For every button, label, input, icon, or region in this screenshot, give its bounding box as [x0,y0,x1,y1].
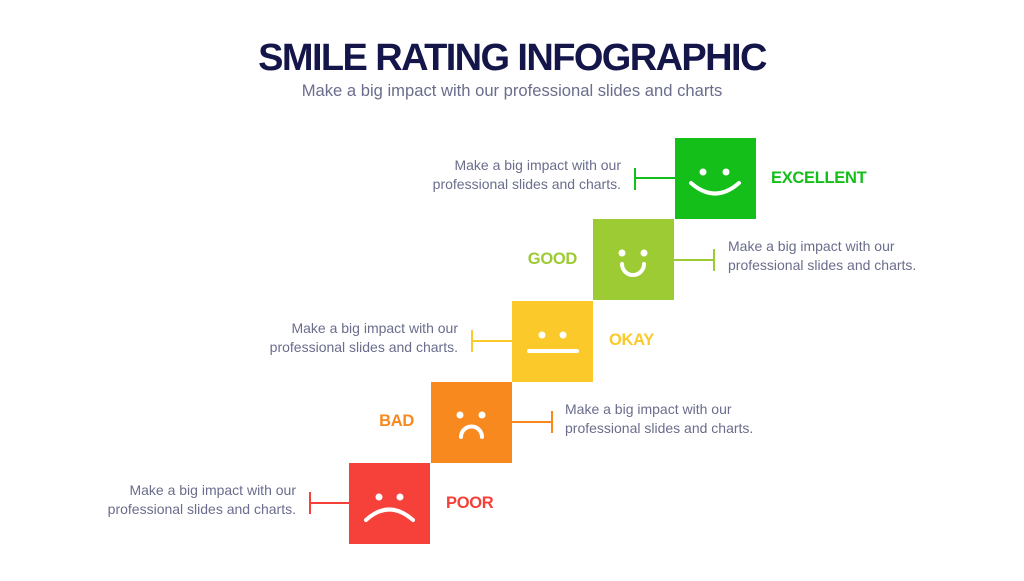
step: poor [108,463,494,544]
step: okay: OKAY [609,331,654,349]
step: okay [270,301,654,382]
subtitle: Make a big impact with our professional slides and charts [302,81,722,100]
step: good: Make a big impact with our [728,238,895,254]
step: excellent: professional slides and charts. [433,176,621,192]
step: bad: professional slides and charts. [565,420,753,436]
step: good [528,219,916,300]
icon: big frown [366,494,413,520]
icon: frown [456,412,486,437]
step: okay: Make a big impact with our [291,320,458,336]
step: excellent: Make a big impact with our [454,157,621,173]
step: good: GOOD [528,250,577,268]
step: excellent [433,138,867,219]
step: poor: Make a big impact with our [129,482,296,498]
icon: neutral [529,332,577,351]
title: SMILE RATING INFOGRAPHIC [258,37,767,79]
step: okay: professional slides and charts. [270,339,458,355]
icon: smile [618,250,648,275]
icon: big smile [691,168,739,194]
step: poor: POOR [446,494,494,512]
step: poor: professional slides and charts. [108,501,296,517]
step: good: professional slides and charts. [728,257,916,273]
step: excellent: EXCELLENT [771,169,867,187]
step: bad: Make a big impact with our [565,401,732,417]
step: bad: BAD [379,412,414,430]
step: bad [379,382,753,463]
